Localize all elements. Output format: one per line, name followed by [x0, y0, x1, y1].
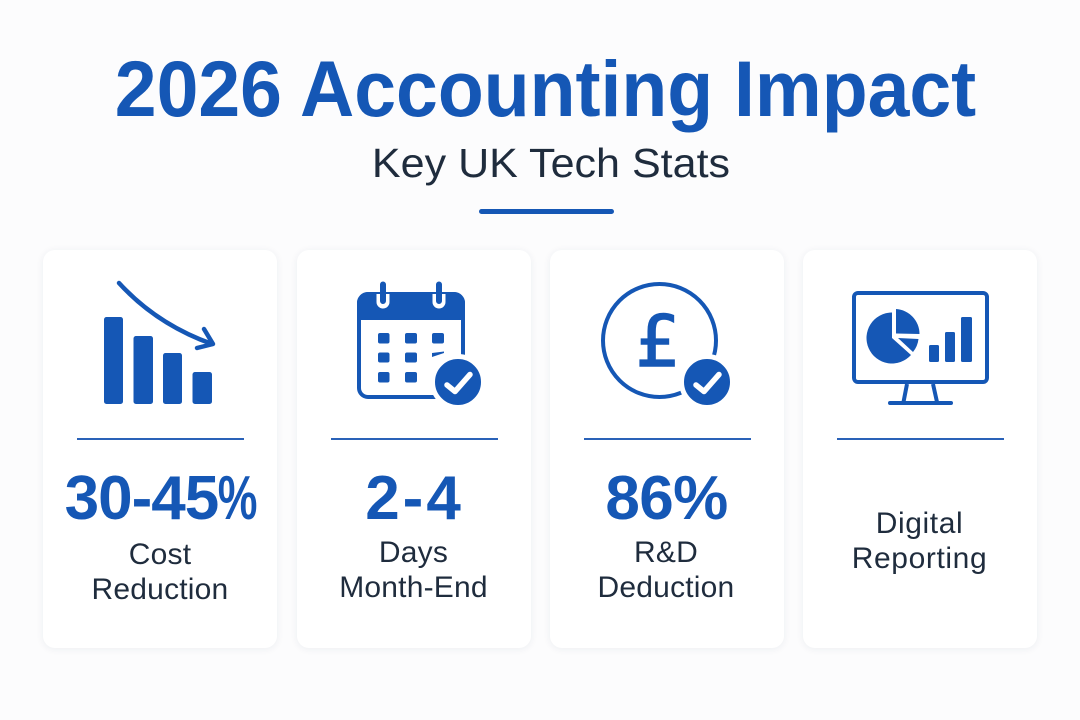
icon: falling bar chart — [104, 280, 216, 404]
stat label: Reduction — [92, 572, 228, 606]
divider — [584, 438, 750, 440]
stat label — [852, 507, 987, 574]
stat label: Reporting — [852, 542, 987, 574]
stat label: Month-End — [339, 570, 488, 604]
panel: month-end days — [297, 250, 531, 648]
stat label — [598, 536, 734, 604]
pound sign: £ — [636, 301, 680, 383]
stat label — [92, 538, 228, 606]
stat label: R&D — [634, 536, 698, 569]
title underline — [479, 209, 614, 214]
panel: R&D deduction — [550, 250, 784, 648]
divider — [330, 438, 498, 440]
icon: monitor with charts — [852, 291, 989, 405]
divider — [836, 438, 1004, 440]
icon: calendar with check — [357, 282, 481, 405]
stat label: Deduction — [598, 570, 734, 604]
stat label: Digital — [876, 507, 963, 540]
subtitle: Key UK Tech Stats — [372, 140, 730, 186]
title: 2026 Accounting Impact — [115, 44, 976, 133]
icon: pound coin with check — [601, 282, 730, 405]
stat value: 86% — [605, 464, 728, 533]
panel: digital reporting — [803, 250, 1037, 648]
stat value: 2-4 — [365, 464, 464, 533]
panel: cost reduction — [43, 250, 277, 648]
stat label: Cost — [129, 538, 191, 571]
stat label: Days — [379, 536, 448, 569]
divider — [76, 438, 244, 440]
stat value: 30-45 — [65, 464, 218, 533]
stat label — [339, 536, 488, 604]
stat value: % — [218, 464, 258, 533]
